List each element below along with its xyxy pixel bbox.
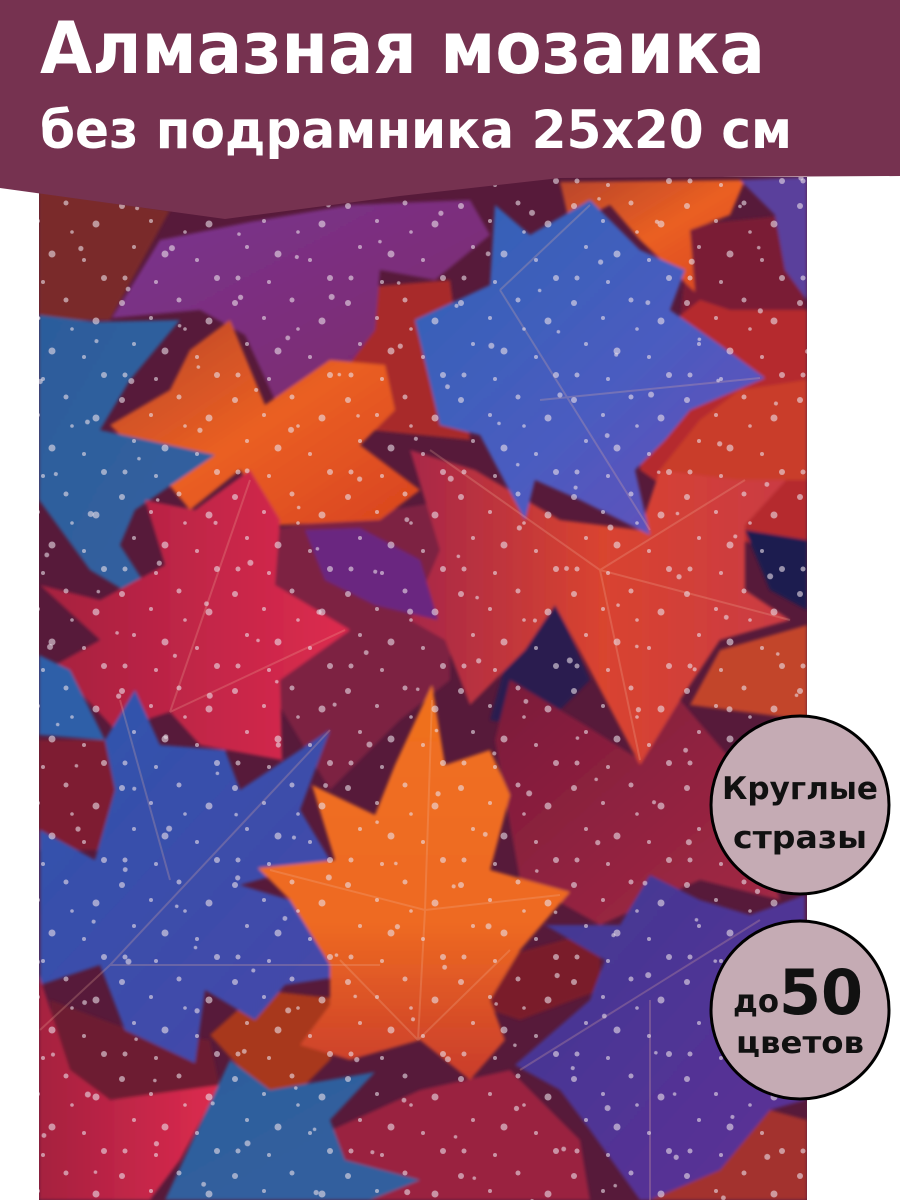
leaf: big red-orange centre-right: [410, 450, 795, 765]
dew drops overlay: secondary scatter: [39, 177, 807, 1200]
leaf: centre dark pink: [270, 500, 450, 790]
badge: up to 50 colours: до: [733, 982, 779, 1020]
leaf: left small blue: [39, 655, 105, 740]
title: Алмазная мозаика: [40, 6, 765, 90]
leaf: top-right purple: [740, 177, 807, 300]
leaf: left dark red under blue: [39, 738, 117, 852]
badge: up to 50 colours: [711, 921, 889, 1099]
leaf: bottom red centre: [320, 1070, 590, 1200]
leaf: purple-blue bottom-right: [515, 875, 805, 1200]
title: [40, 6, 792, 161]
leaf: top-right blue: [415, 200, 765, 535]
leaf: left blue: [39, 315, 215, 615]
leaf: bottom small orange: [210, 990, 350, 1090]
badge: up to 50 colours: 50: [779, 956, 863, 1029]
patch: right navy gap: [745, 530, 807, 610]
patch: dark navy gaps: [490, 600, 590, 730]
badge: round rhinestones: Круглые: [722, 771, 878, 807]
leaf: lower right orange: [690, 625, 807, 720]
leaf: upper-right dark red: [680, 215, 807, 320]
leaf: top purple: [112, 200, 490, 400]
leaf veins: [40, 205, 790, 1200]
header banner: [0, 0, 900, 219]
dew drops overlay: [39, 177, 807, 1200]
leaf: centre red patch: [350, 278, 472, 442]
leaf: top orange: [560, 180, 745, 292]
badge: round rhinestones: стразы: [733, 820, 867, 856]
leaf: bottom-left red: [39, 975, 220, 1200]
leaf: dark red beneath maple right: [490, 930, 600, 1020]
leaf: dark red bottom-left gap: [50, 1000, 220, 1100]
leaf: red-pink left: [40, 470, 350, 760]
leaf: right orange-red upper: [660, 380, 807, 480]
badge: up to 50 colours: цветов: [736, 1026, 864, 1061]
leaf: blue bottom-left: [39, 689, 333, 1065]
leaf: right red: [640, 300, 807, 560]
leaf: orange centre-left: [110, 320, 420, 525]
subtitle: без подрамника 25х20 см: [40, 100, 792, 161]
leaf: small purple: [305, 528, 438, 620]
badge: round rhinestones: [711, 716, 889, 894]
leaf: bottom-right red: [650, 1110, 807, 1200]
leaf: orange maple centre: [258, 685, 570, 1080]
leaf: dark red lower-right: [495, 680, 780, 925]
leaf: bottom centre blue: [165, 1060, 420, 1200]
leaf: top-left dark red: [39, 190, 170, 320]
artwork: autumn leaves with dew drops: [39, 177, 807, 1200]
